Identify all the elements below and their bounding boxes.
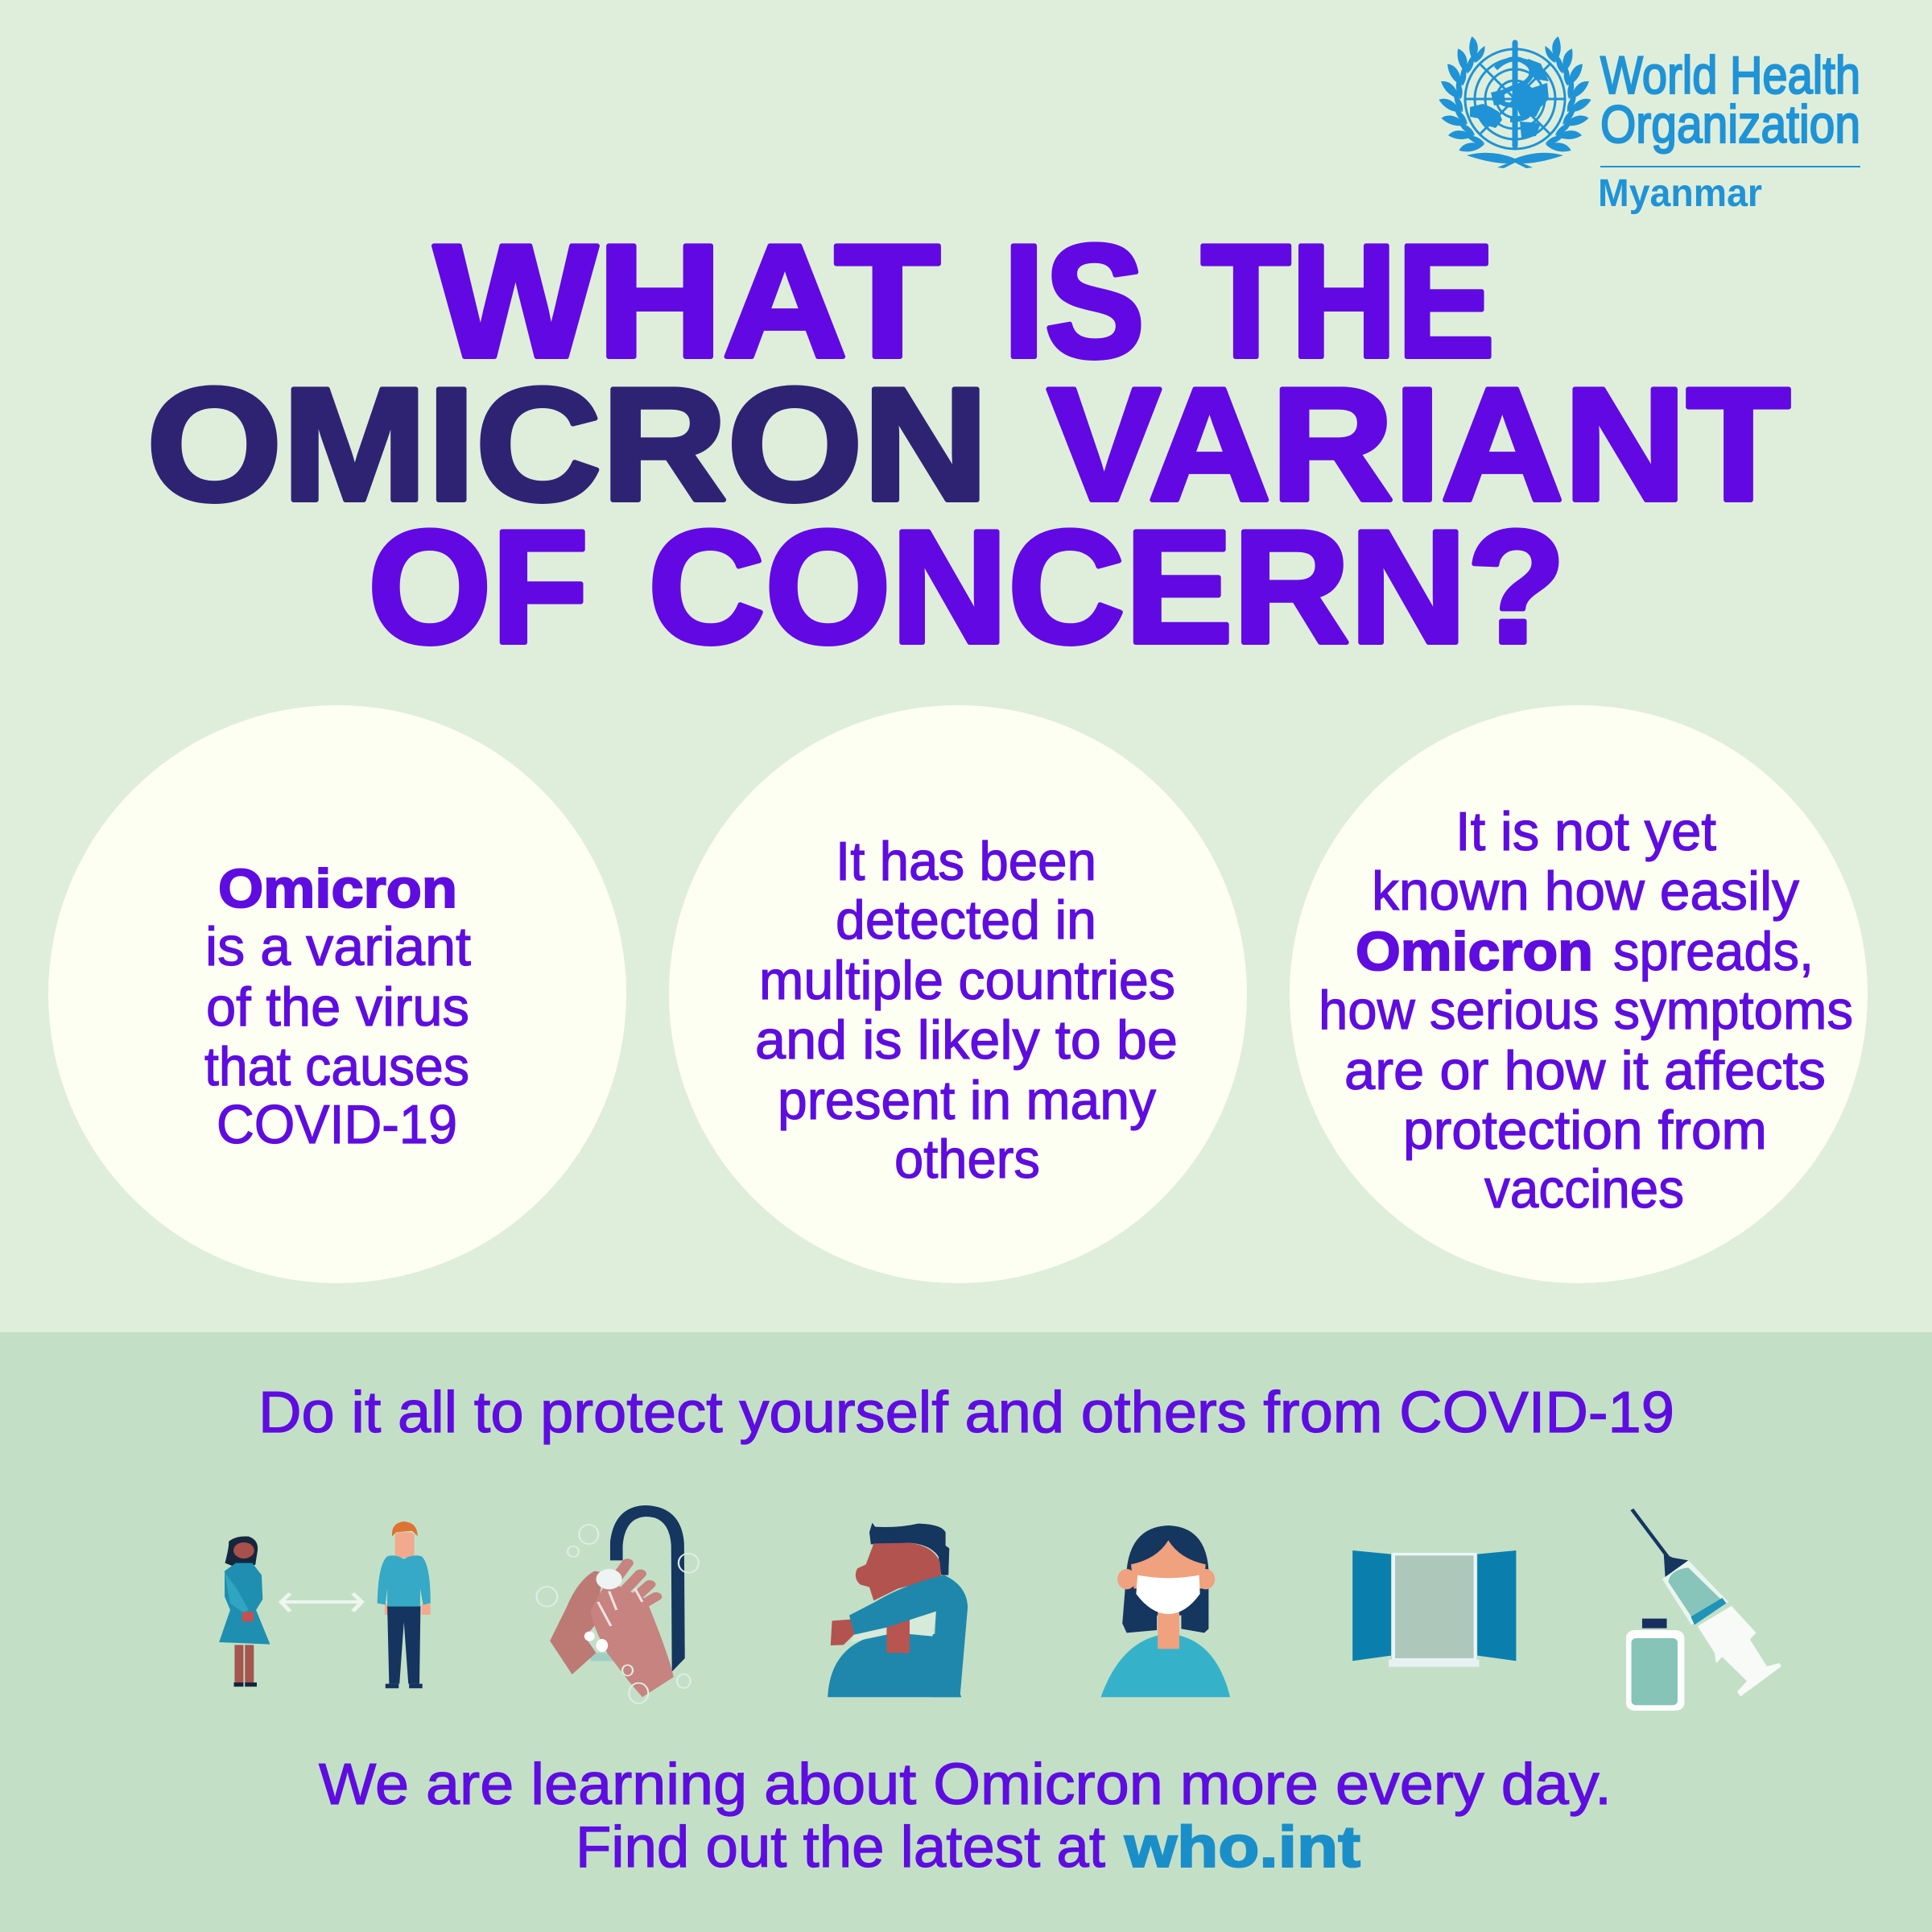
footer text: learning about Omicron: We are learning about Omicron more every day. [319, 1752, 1612, 1817]
panel: what Omicron is: that causes [204, 1036, 469, 1097]
logo wordmark: Myanmar [1598, 172, 1762, 215]
title [147, 212, 1790, 677]
staff [1512, 43, 1518, 146]
panel: what Omicron is [48, 705, 626, 1283]
title: CONCERN? [648, 497, 1566, 677]
left laurel [1439, 35, 1489, 160]
footer text: learning about Omicron [319, 1752, 1612, 1880]
title: WHAT [434, 212, 940, 391]
panel: what is unknown: how serious symptoms [1319, 980, 1853, 1041]
panel: what is unknown: It is not yet [1455, 801, 1716, 862]
icon: open window [1352, 1550, 1516, 1667]
heading: protect yourself: Do it all to protect yourself and others from COVID-19 [258, 1381, 1674, 1445]
arrow: keep distance [281, 1593, 361, 1612]
panel: what is unknown [1290, 705, 1868, 1283]
logo wordmark [1598, 45, 1860, 215]
title: OF [368, 497, 588, 677]
WHO Myanmar logo [1439, 35, 1860, 215]
icon: physical distancing [219, 1521, 431, 1688]
panel: where detected [669, 705, 1247, 1283]
bottom band [0, 1332, 1932, 1932]
title: IS [1003, 212, 1145, 391]
panel: what is unknown: vaccines [1484, 1158, 1684, 1220]
title: THE [1201, 212, 1495, 391]
icon: WHO emblem [1439, 35, 1591, 168]
icon: vaccine syringe and vial [1626, 1509, 1781, 1711]
right laurel [1541, 35, 1591, 160]
panel: where detected: and is likely to be [755, 1009, 1178, 1071]
panel: what Omicron is: of the virus [206, 976, 469, 1038]
man [378, 1521, 431, 1688]
panel: where detected: It has been [836, 831, 1096, 892]
panel: where detected: present in many [778, 1070, 1156, 1131]
icon: cough into elbow [828, 1523, 968, 1697]
logo wordmark: Organization [1600, 94, 1860, 154]
logo wordmark: World Health [1600, 45, 1860, 105]
panel: what is unknown: Omicron [1356, 921, 1593, 982]
panel: what is unknown: known how easily [1372, 861, 1799, 922]
panel: what Omicron is: is a variant [205, 916, 471, 977]
panel: where detected: others [894, 1129, 1040, 1190]
title: OMICRON [147, 355, 989, 535]
ribbon [1467, 153, 1563, 168]
footer text: learning about Omicron: Find out the latest at [576, 1815, 1105, 1880]
panel: what is unknown: protection from [1403, 1100, 1767, 1161]
panel: what Omicron is: COVID-19 [217, 1094, 457, 1155]
footer text: learning about Omicron: who.int [1124, 1815, 1360, 1880]
snake [1496, 59, 1532, 120]
woman [219, 1537, 270, 1686]
panel: what Omicron is: Omicron [218, 858, 457, 919]
icon: hand washing [537, 1505, 699, 1703]
panel: where detected: detected in [836, 890, 1096, 951]
panel: where detected: multiple countries [759, 950, 1175, 1011]
panel: what is unknown: spreads, [1613, 921, 1814, 982]
title: VARIANT [1047, 355, 1790, 535]
panel: what is unknown: are or how it affects [1344, 1040, 1826, 1101]
icon: wear a mask [1100, 1525, 1230, 1697]
